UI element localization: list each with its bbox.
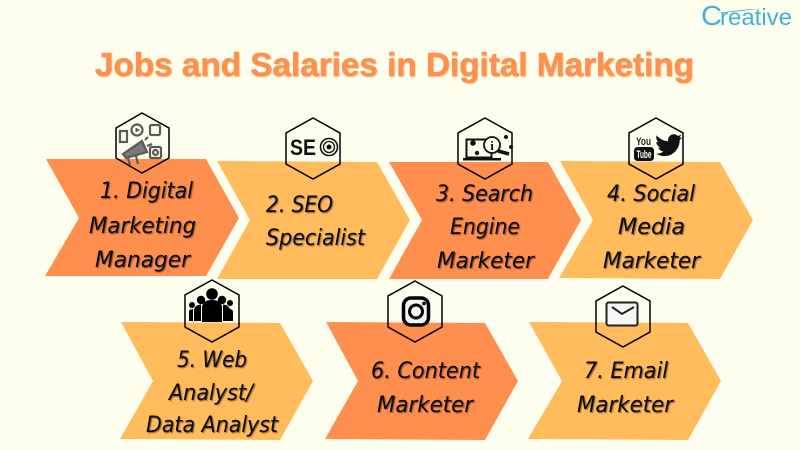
icon: SEO target: SE <box>290 135 316 160</box>
icon: YouTube and Twitter: You <box>636 136 651 148</box>
label 6: 6. Content <box>371 358 481 384</box>
panel: 1. Digital Marketing Manager <box>45 113 239 276</box>
label 3: 3. Search <box>436 181 533 207</box>
label 1: Marketing <box>89 213 196 239</box>
hexagon badge 3 <box>458 118 512 179</box>
chevron 7 <box>528 322 721 440</box>
label 2 <box>266 192 366 251</box>
label 6 <box>371 358 481 418</box>
panel: 7. Email Marketer <box>528 286 721 440</box>
icon: envelope <box>606 302 638 326</box>
label 1: 1. Digital <box>100 178 194 204</box>
icon: YouTube and Twitter: Tube <box>636 149 652 161</box>
label 7: Marketer <box>577 392 675 418</box>
logo: Creative: C <box>701 0 722 31</box>
logo: Creative <box>701 0 792 31</box>
panel: 6. Content Marketer <box>325 281 518 440</box>
panel: 4. Social Media Marketer <box>559 118 753 279</box>
label 1 <box>89 178 196 273</box>
label 3 <box>436 181 536 274</box>
hexagon badge 1 <box>116 113 169 173</box>
icon: laptop and magnifier <box>463 135 513 160</box>
label 2: 2. SEO <box>266 192 333 218</box>
label 1: Manager <box>95 247 192 273</box>
hexagon badge 5 <box>185 280 239 342</box>
panel: 3. Search Engine Marketer <box>389 118 581 279</box>
label 5: Analyst/ <box>167 380 255 406</box>
label 2: Specialist <box>266 225 366 251</box>
panel: 5. Web Analyst / Data Analyst <box>120 280 313 440</box>
panel: 2. SEO Specialist <box>217 118 410 279</box>
chevron 6 <box>325 322 518 440</box>
icon: group of people <box>189 288 233 322</box>
title: Jobs and Salaries in Digital Marketing <box>95 46 694 83</box>
label 4: Media <box>618 214 685 240</box>
icon: digital marketing megaphone <box>120 124 161 165</box>
label 4: 4. Social <box>607 181 696 207</box>
chevron 5 <box>120 322 313 440</box>
hexagon badge 6 <box>388 281 442 342</box>
icon: YouTube and Twitter <box>634 134 682 161</box>
hexagon badge 7 <box>596 286 650 347</box>
icon: laptop and magnifier: i <box>490 138 494 153</box>
label 7: 7. Email <box>584 358 669 384</box>
icon: SEO target <box>290 135 338 160</box>
icon: Instagram <box>404 298 428 325</box>
label 5: 5. Web <box>177 347 247 373</box>
chevron 3 <box>389 162 581 279</box>
label 4 <box>603 181 702 274</box>
hexagon badge 2 <box>286 118 340 179</box>
label 4: Marketer <box>603 248 702 274</box>
label 3: Marketer <box>437 248 536 274</box>
chevron 1 <box>45 159 239 276</box>
logo: Creative: reative <box>720 4 792 30</box>
label 6: Marketer <box>377 392 475 418</box>
label 5 <box>146 347 279 438</box>
hexagon badge 4 <box>629 118 683 179</box>
chevron 2 <box>217 161 410 279</box>
chevron 4 <box>559 161 753 279</box>
label 7 <box>577 358 675 418</box>
label 3: Engine <box>450 214 520 240</box>
label 5: Data Analyst <box>146 412 279 438</box>
